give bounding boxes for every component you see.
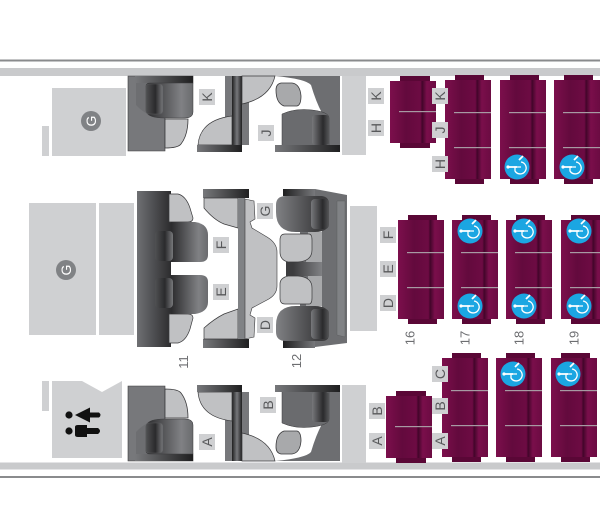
label D: D [257,320,273,330]
business suite top: seats J K [128,76,340,152]
galley middle: G [58,265,74,275]
galley top: G [83,116,99,126]
row number 11: 11 [176,355,191,369]
economy seat letters middle [380,227,396,311]
label B: B [260,400,276,410]
label centre G: G [257,206,273,216]
galley top [42,88,126,156]
bulkhead bottom [342,385,366,463]
economy seat letters top [368,88,448,172]
economy seat letters middle: D [380,298,396,308]
label F: F [213,241,229,249]
icon: lavatory people [65,408,100,437]
economy seat letters bottom: B [369,406,385,416]
row numbers 16 to 19: 18 [512,331,526,345]
label D [257,317,273,333]
row numbers 16 to 19: 16 [402,331,418,345]
economy seats middle [398,215,600,324]
label E [213,284,229,300]
economy seat letters bottom: A [369,436,385,446]
label K: K [199,92,215,102]
label J: J [258,130,274,136]
label K [199,89,215,105]
economy seat letters bottom: C [432,369,448,379]
economy seats top [390,75,600,184]
business suite bottom: seats A B [128,385,340,461]
row numbers 16 to 19: 19 [566,331,582,345]
label A [199,434,215,450]
label B [260,397,276,413]
cabin wall bottom [0,462,600,478]
economy seat letters top: H [368,123,384,133]
economy seat letters middle: F [380,231,396,239]
seat row 11 centre [137,191,208,347]
row number 12: 12 [289,354,304,368]
cabin wall top [0,60,600,76]
economy seat letters bottom [369,366,448,449]
economy seat letters top: K [432,91,448,101]
economy seat letters bottom: A [432,436,448,446]
economy seat letters top: H [432,159,448,169]
seat row 12 centre [276,189,347,348]
row numbers 16 to 19: 17 [458,331,472,345]
economy seat letters top: K [368,91,384,101]
economy seats bottom [386,353,597,463]
economy seat letters bottom: B [432,401,448,411]
centre console and footrests [203,189,277,348]
label centre G [257,203,273,219]
label E: E [213,287,229,297]
row numbers 16 to 19 [402,331,582,345]
lavatory [42,381,122,458]
economy seat letters top: J [432,126,448,134]
label A: A [199,437,215,447]
bulkhead middle [350,206,377,331]
galley middle [29,203,134,335]
label J [258,125,274,141]
wheelchair icons [458,154,592,386]
economy seat letters middle: E [380,264,396,274]
bulkhead top [342,76,366,155]
label F [213,237,229,253]
